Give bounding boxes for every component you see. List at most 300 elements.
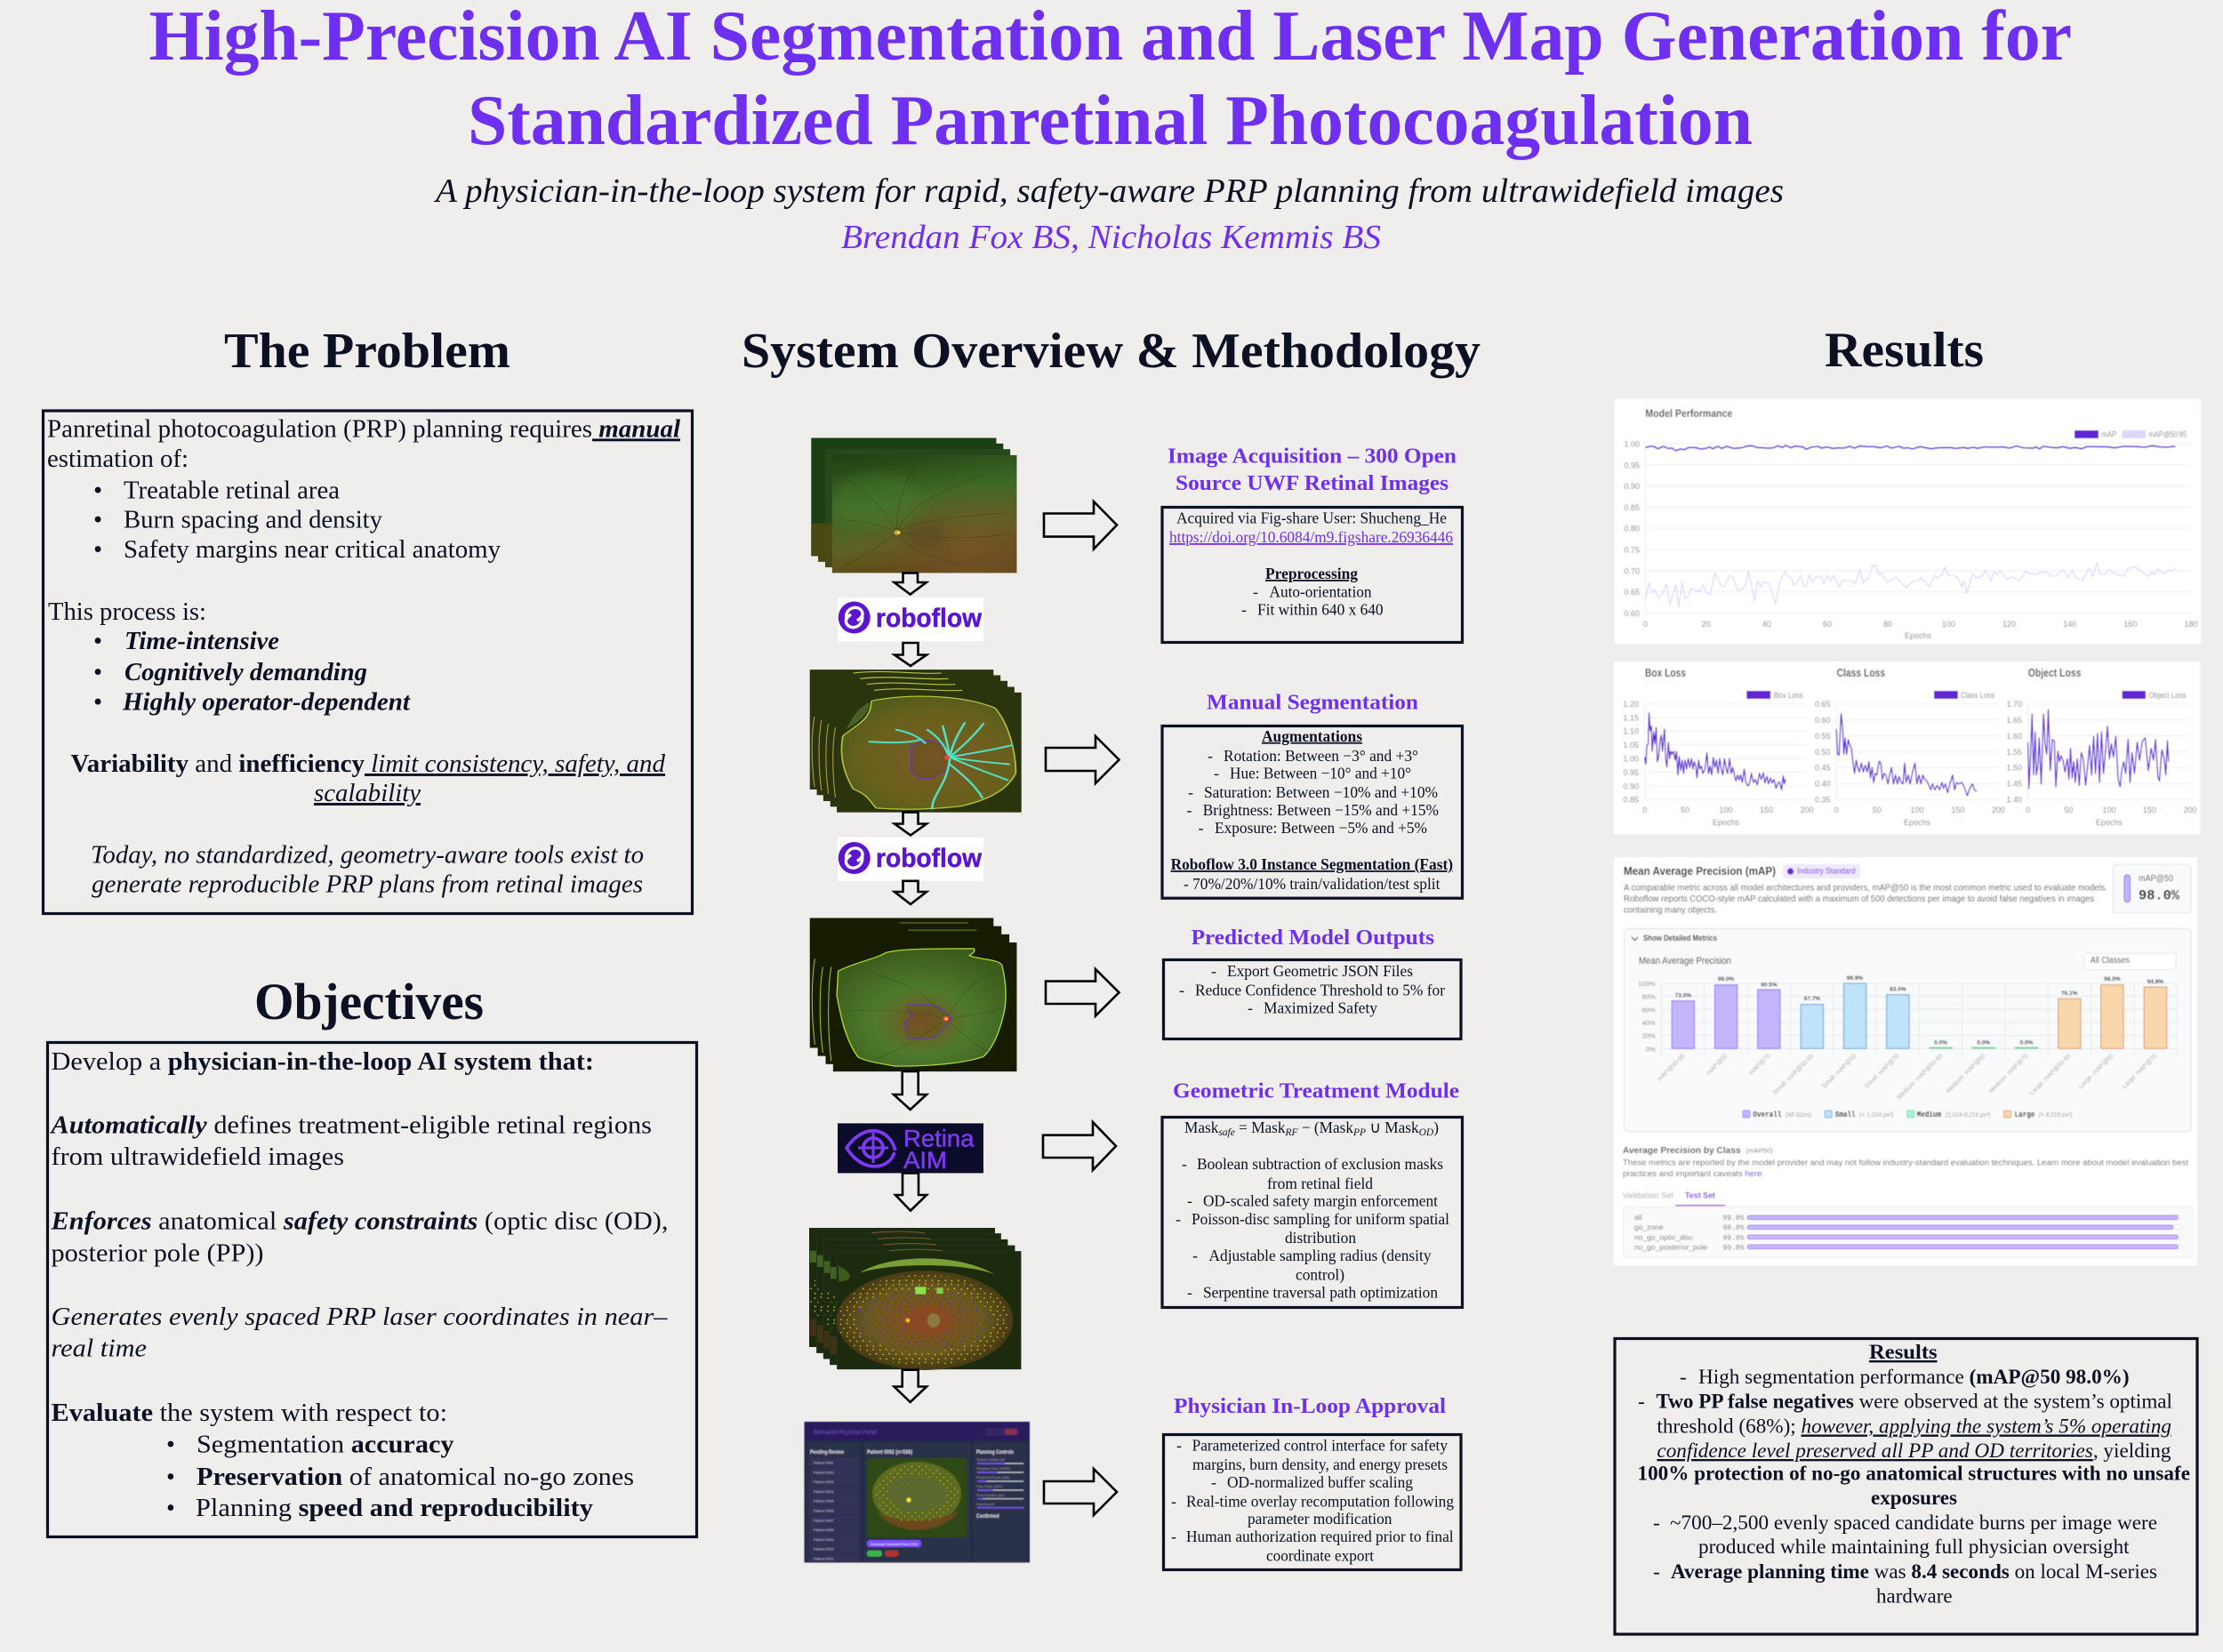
icon: target eye bbox=[847, 1131, 895, 1167]
portal planning controls: Peripheral Power (mW) bbox=[976, 1476, 1009, 1480]
portal sidebar: Patient 0010 bbox=[814, 1547, 834, 1551]
objective: automatically defines: from ultrawidefield images bbox=[52, 1143, 344, 1171]
class precision table bbox=[1624, 1207, 2193, 1257]
panel: physician approval details: OD-normalized buffer scaling bbox=[1227, 1473, 1413, 1491]
portal planning controls bbox=[973, 1442, 1026, 1562]
panel: image acquisition details: Acquired via Fig-share User: Shucheng_He bbox=[1176, 509, 1447, 527]
safe mask formula: RF bbox=[1285, 1126, 1298, 1138]
result: candidate burns: ~700–2,500 evenly spaced candidate burns per image were bbox=[1670, 1512, 2157, 1535]
chart: object loss: 100 bbox=[2102, 806, 2116, 814]
legend: mAP bbox=[2101, 430, 2116, 439]
heading: geometric treatment module: Geometric Treatment Module bbox=[1173, 1079, 1459, 1103]
chart panel: model performance: 0.65 bbox=[1624, 588, 1640, 597]
gap statement: Today, no standardized, geometry-aware tools exist to bbox=[91, 841, 644, 870]
portal planning controls: Planning Controls bbox=[976, 1450, 1015, 1456]
bar value labels bbox=[1675, 975, 2163, 1046]
title: Standardized Panretinal Photocoagulation bbox=[468, 82, 1753, 160]
panel: image acquisition details: - bbox=[1241, 600, 1247, 618]
result: segmentation performance: - bbox=[1680, 1366, 1687, 1389]
category labels bbox=[1657, 1053, 2158, 1101]
y axis labels: 20% bbox=[1642, 1032, 1656, 1040]
category labels: Medium: mAP@50-95 bbox=[1897, 1053, 1944, 1101]
chart: box loss: 1.20 bbox=[1623, 700, 1639, 709]
heading: Results: Results bbox=[1825, 323, 1984, 378]
bar value labels: 99.9% bbox=[1847, 975, 1863, 982]
panel: geometric module details: from retinal field bbox=[1267, 1175, 1373, 1192]
panel: results summary bbox=[1615, 1339, 2197, 1634]
panel: physician approval details: - bbox=[1176, 1437, 1182, 1455]
evaluation bullets bbox=[166, 1431, 634, 1522]
safe mask formula: Mask bbox=[1184, 1119, 1220, 1136]
chart: class loss: 0 bbox=[1834, 806, 1839, 814]
chart: box loss: 1.00 bbox=[1623, 754, 1639, 763]
panel: physician approval details: Human authorization required prior to final bbox=[1186, 1528, 1454, 1545]
panel: image acquisition details: Fit within 640 x 640 bbox=[1257, 600, 1384, 618]
stat card: mAP@50: 98.0% bbox=[2139, 888, 2179, 904]
bar chart legend: (All Sizes) bbox=[1786, 1112, 1812, 1119]
chart: box loss: 150 bbox=[1760, 806, 1773, 814]
result: planning time bbox=[1653, 1560, 2157, 1608]
chart panel: model performance: 0.80 bbox=[1624, 525, 1640, 533]
chart: class loss bbox=[1815, 667, 2005, 827]
portal header bbox=[804, 1422, 1030, 1440]
chart panel: model performance: 20 bbox=[1702, 620, 1711, 629]
category labels: Medium: mAP@75 bbox=[1988, 1053, 2029, 1095]
bar chart gridlines bbox=[1661, 983, 2177, 1055]
y axis labels: 100% bbox=[1638, 980, 1656, 988]
bar chart legend bbox=[1743, 1111, 2072, 1119]
chart: class loss: 100 bbox=[1910, 806, 1924, 814]
chart panel: model performance: 100 bbox=[1942, 620, 1955, 629]
chart: class loss: 0.50 bbox=[1815, 748, 1830, 757]
arrow: images to roboflow bbox=[895, 573, 927, 594]
process bullets: • bbox=[93, 627, 102, 655]
chart: class loss: 200 bbox=[1992, 806, 2005, 814]
chart: box loss: 50 bbox=[1681, 806, 1689, 814]
arrow: to manual segmentation bbox=[1046, 736, 1119, 783]
result: planning time: - bbox=[1653, 1560, 1660, 1584]
bar chart legend: Small bbox=[1835, 1111, 1856, 1119]
heading: predicted model outputs: Predicted Model Outputs bbox=[1192, 926, 1434, 950]
panel: mean average precision bbox=[1614, 857, 2197, 1266]
result: planning time: Average planning time was 8.4 seconds on local M-series bbox=[1671, 1560, 2157, 1584]
arrow: treatment map to portal bbox=[895, 1370, 927, 1402]
manual estimation bullets: Safety margins near critical anatomy bbox=[124, 535, 501, 564]
panel: geometric module details: - bbox=[1182, 1155, 1187, 1173]
y axis labels bbox=[1638, 980, 1656, 1053]
average precision by class: These metrics are reported by the model provider and may not follow industry-standard evaluation techniques. Learn more about model evaluation best bbox=[1623, 1159, 2189, 1167]
arrow: RetinaAIM to treatment map bbox=[895, 1173, 927, 1211]
panel: physician approval details bbox=[1163, 1435, 1461, 1570]
panel: geometric module details: Adjustable sampling radius (density bbox=[1209, 1247, 1432, 1265]
arrow: predictions to RetinaAIM bbox=[894, 1071, 927, 1110]
panel: predicted outputs details: - bbox=[1211, 962, 1216, 980]
objective: automatically defines bbox=[49, 1111, 652, 1171]
chart: class loss: 50 bbox=[1873, 806, 1882, 814]
objective: evaluate: Evaluate the system with respect to: bbox=[52, 1399, 447, 1427]
chart: box loss: 0.95 bbox=[1623, 768, 1639, 777]
category labels: Small: mAP@50 bbox=[1821, 1053, 1858, 1090]
portal planning controls: Pulse Duration (ms) bbox=[976, 1494, 1005, 1497]
average precision by class: 99.0% bbox=[1723, 1215, 1745, 1223]
posterior pole outline bbox=[911, 740, 950, 778]
result: false negatives: Two PP false negatives were observed at the system’s optimal bbox=[1656, 1391, 2172, 1414]
badge: industry standard bbox=[1783, 864, 1860, 878]
chart panel: model performance: Model Performance bbox=[1645, 409, 1732, 420]
evaluation bullets: Planning speed and reproducibility bbox=[196, 1495, 593, 1522]
panel: physician approval details: margins, burn density, and energy presets bbox=[1192, 1456, 1448, 1473]
legend bbox=[2075, 430, 2187, 439]
vessel annotations bbox=[870, 723, 1012, 809]
problem statement text bbox=[47, 414, 681, 473]
average precision by class: 98.0% bbox=[1723, 1224, 1745, 1232]
gap statement: generate reproducible PRP plans from retinal images bbox=[92, 870, 643, 898]
category labels: Medium: mAP@50 bbox=[1946, 1053, 1986, 1095]
average precision by class: all bbox=[1634, 1213, 1642, 1222]
manual estimation bullets: • bbox=[93, 535, 102, 564]
result: planning time: hardware bbox=[1876, 1585, 1953, 1608]
panel: geometric module details: - bbox=[1187, 1192, 1192, 1210]
bar chart legend: (> 8,216 px²) bbox=[2038, 1112, 2072, 1119]
result: candidate burns: - bbox=[1653, 1512, 1660, 1535]
panel: manual segmentation details: Roboflow 3.0 Instance Segmentation (Fast) bbox=[1171, 855, 1453, 874]
panel: geometric module details: - bbox=[1192, 1247, 1198, 1264]
chart: class loss: 0.45 bbox=[1815, 764, 1830, 773]
panel: image acquisition details: - bbox=[1253, 583, 1258, 601]
panel: predicted outputs details bbox=[1163, 960, 1461, 1039]
manual estimation bullets: Treatable retinal area bbox=[124, 477, 340, 505]
heading: Objectives: Objectives bbox=[254, 973, 484, 1030]
panel: manual segmentation details: Exposure: Between −5% and +5% bbox=[1215, 819, 1427, 837]
chart: object loss: 1.55 bbox=[2006, 748, 2022, 757]
logo: RetinaAIM: Retina bbox=[903, 1126, 975, 1152]
green treatment markers bbox=[915, 1287, 926, 1295]
chart panel: model performance: 0.60 bbox=[1624, 609, 1640, 618]
panel: predicted outputs details: - bbox=[1248, 998, 1253, 1016]
result: segmentation performance: High segmentation performance (mAP@50 98.0%) bbox=[1698, 1366, 2130, 1389]
objective: generates: Generates evenly spaced PRP laser coordinates in near– bbox=[52, 1303, 669, 1331]
line: mAP bbox=[1645, 445, 2175, 451]
physician portal screenshot bbox=[804, 1422, 1030, 1562]
image stack: predicted outputs bbox=[810, 918, 1016, 1071]
optic disc bbox=[944, 756, 950, 759]
chart: box loss: 200 bbox=[1801, 806, 1814, 814]
subtitle: A physician-in-the-loop system for rapid, safety-aware PRP planning from ultrawidefield images bbox=[433, 172, 1784, 210]
logo: roboflow training: roboflow bbox=[876, 844, 983, 873]
evaluation bullets: • bbox=[166, 1495, 175, 1522]
mAP description: containing many objects. bbox=[1624, 904, 1717, 915]
variability statement: Variability and inefficiency limit consistency, safety, and bbox=[71, 750, 665, 778]
panel: physician approval details: Parameterized control interface for safety bbox=[1192, 1437, 1448, 1455]
logo: RetinaAIM bbox=[838, 1123, 983, 1174]
panel: geometric module details: - bbox=[1187, 1283, 1192, 1301]
result: candidate burns: produced while maintaining full physician oversight bbox=[1698, 1536, 2130, 1559]
average precision by class: Average Precision by Class bbox=[1623, 1145, 1741, 1156]
chart: class loss: 0.60 bbox=[1815, 716, 1830, 725]
bar chart legend: Large bbox=[2015, 1111, 2034, 1119]
chart: class loss: Class Loss bbox=[1961, 691, 1994, 700]
category labels: mAP@75 bbox=[1748, 1053, 1771, 1077]
evaluation bullets: Preservation of anatomical no-go zones bbox=[197, 1464, 634, 1491]
detailed metrics panel: All Classes bbox=[2091, 956, 2130, 966]
result: candidate burns bbox=[1653, 1512, 2157, 1559]
portal sidebar: Patient 0005 bbox=[814, 1499, 834, 1503]
chart: object loss: 1.40 bbox=[2006, 796, 2022, 805]
average precision by class: Test Set bbox=[1685, 1191, 1715, 1200]
portal sidebar: Patient 0008 bbox=[814, 1528, 834, 1532]
category labels: mAP@50 bbox=[1705, 1053, 1729, 1077]
panel: manual segmentation details: - bbox=[1186, 801, 1192, 819]
small bars bbox=[1801, 983, 1909, 1048]
y axis labels: 40% bbox=[1642, 1019, 1656, 1027]
chart: box loss: 0 bbox=[1642, 806, 1647, 814]
variability statement: scalability bbox=[314, 779, 421, 807]
chart panel: model performance: 0.95 bbox=[1624, 461, 1640, 469]
manual estimation bullets bbox=[93, 477, 501, 564]
portal planning controls: Distance Buffer (dd) bbox=[976, 1458, 1005, 1462]
result: false negatives: threshold (68%); however, applying the system’s 5% operating bbox=[1657, 1415, 2171, 1439]
predicted posterior pole bbox=[905, 1005, 951, 1039]
process bullets bbox=[93, 627, 411, 717]
portal planning controls: Flow Power (GHF) bbox=[976, 1485, 1003, 1488]
panel: image acquisition details bbox=[1162, 507, 1462, 642]
chart: object loss: 1.60 bbox=[2006, 732, 2022, 741]
chart: box loss: 0.90 bbox=[1623, 782, 1639, 790]
y axis labels: 60% bbox=[1642, 1006, 1656, 1014]
chart: object loss: Epochs bbox=[2096, 818, 2123, 827]
result: false negatives: - bbox=[1638, 1391, 1645, 1414]
bar chart legend: (1,024-8,216 px²) bbox=[1946, 1112, 1990, 1119]
portal sidebar: Patient 0006 bbox=[814, 1508, 834, 1513]
category labels: Large: mAP@50-95 bbox=[2029, 1053, 2072, 1096]
panel: geometric module details: - bbox=[1176, 1210, 1181, 1228]
arrow: segmentation to roboflow bbox=[895, 813, 927, 835]
heading: image acquisition bbox=[1168, 445, 1457, 495]
portal center panel: Patient 0082 (n=588) bbox=[867, 1450, 912, 1456]
manual estimation bullets: Burn spacing and density bbox=[124, 505, 382, 533]
logo: roboflow training bbox=[838, 838, 983, 881]
chart: object loss: 1.50 bbox=[2006, 764, 2022, 773]
evaluation bullets: • bbox=[166, 1464, 175, 1491]
objective: generates bbox=[52, 1303, 669, 1363]
objective: generates: real time bbox=[52, 1335, 147, 1363]
panel: manual segmentation details: Rotation: Between −3° and +3° bbox=[1224, 747, 1418, 765]
process bullets: • bbox=[93, 688, 102, 717]
bar value labels: 94.8% bbox=[2147, 979, 2163, 985]
panel: geometric module details: distribution bbox=[1285, 1229, 1356, 1247]
chart: box loss: Box Loss bbox=[1645, 667, 1686, 679]
logo: roboflow bbox=[838, 597, 983, 642]
heading: manual segmentation: Manual Segmentation bbox=[1207, 691, 1418, 714]
chart: box loss: 100 bbox=[1719, 806, 1733, 814]
logo: roboflow: roboflow bbox=[876, 604, 983, 633]
panel: predicted outputs details: Export Geometric JSON Files bbox=[1227, 962, 1413, 980]
problem statement text: estimation of: bbox=[47, 445, 189, 473]
bar value labels: 0.0% bbox=[1977, 1040, 1990, 1046]
chart: box loss: 1.05 bbox=[1623, 741, 1639, 750]
panel: geometric module details: Serpentine traversal path optimization bbox=[1203, 1283, 1438, 1301]
chart panel: model performance: 0.75 bbox=[1624, 546, 1640, 555]
chart: class loss: Epochs bbox=[1904, 818, 1931, 827]
chart: object loss: Object Loss bbox=[2028, 667, 2081, 679]
tabs: Validation Set bbox=[1623, 1191, 1674, 1200]
average precision by class: 99.0% bbox=[1723, 1234, 1745, 1242]
panel: physician approval details: - bbox=[1211, 1473, 1216, 1491]
safe mask formula: OD bbox=[1419, 1126, 1434, 1138]
stat card: mAP@50: mAP@50 bbox=[2139, 874, 2173, 884]
portal sidebar bbox=[807, 1442, 861, 1562]
heading: image acquisition: Source UWF Retinal Images bbox=[1176, 472, 1449, 495]
objective: enforces: Enforces anatomical safety constraints (optic disc (OD), bbox=[50, 1208, 669, 1236]
detailed metrics panel: Mean Average Precision bbox=[1639, 956, 1731, 966]
result: false negatives bbox=[1638, 1391, 2190, 1510]
objective: develop: Develop a physician-in-the-loop AI system that: bbox=[52, 1048, 594, 1076]
large bars bbox=[2058, 985, 2167, 1048]
chart panel: model performance: 0 bbox=[1643, 620, 1648, 629]
chart panel: model performance: 80 bbox=[1883, 620, 1892, 629]
chart: box loss: 1.15 bbox=[1623, 713, 1639, 722]
average precision by class: practices and important caveats here. bbox=[1623, 1169, 1764, 1178]
mAP description: A comparable metric across all model architectures and providers, mAP@50 is the most common metric used to evaluate models. bbox=[1624, 883, 2107, 894]
chart: box loss: 1.10 bbox=[1623, 727, 1639, 736]
panel: manual segmentation details: - 70%/20%/10% train/validation/test split bbox=[1184, 875, 1440, 893]
chart: object loss: 0 bbox=[2026, 806, 2030, 814]
portal sidebar: Patient 0002 bbox=[814, 1471, 834, 1474]
bar value labels: 0.0% bbox=[1934, 1040, 1947, 1046]
gap statement bbox=[91, 841, 644, 898]
safe mask formula: safe bbox=[1218, 1126, 1235, 1138]
chart: class loss: 0.35 bbox=[1815, 796, 1830, 805]
portal sidebar: Patient 0009 bbox=[814, 1537, 834, 1542]
portal center panel bbox=[863, 1442, 970, 1562]
result: false negatives: confidence level preserved all PP and OD territories, yielding bbox=[1657, 1439, 2171, 1463]
manual estimation bullets: • bbox=[93, 505, 102, 533]
panel: the problem bbox=[43, 411, 692, 914]
safe mask formula: = Mask bbox=[1235, 1119, 1286, 1136]
chart: class loss: 150 bbox=[1951, 806, 1965, 814]
portal sidebar: Patient 0004 bbox=[814, 1489, 834, 1494]
chart panel: model performance: 120 bbox=[2002, 620, 2016, 629]
average precision by class bbox=[1623, 1145, 2193, 1257]
panel: geometric module details: Poisson-disc sampling for uniform spatial bbox=[1192, 1210, 1449, 1228]
problem statement text: Panretinal photocoagulation (PRP) planning requires manual bbox=[47, 414, 681, 443]
heading: The Problem: The Problem bbox=[224, 324, 510, 379]
chart: box loss bbox=[1623, 667, 1814, 827]
bar value labels: 67.7% bbox=[1804, 996, 1820, 1002]
average precision by class: (mAP50) bbox=[1745, 1147, 1774, 1154]
chart panel: model performance: 140 bbox=[2063, 620, 2076, 629]
category labels: Large: mAP@75 bbox=[2122, 1053, 2158, 1090]
bar value labels: 76.1% bbox=[2061, 990, 2078, 997]
panel: manual segmentation details: Saturation: Between −10% and +10% bbox=[1204, 783, 1438, 801]
authors: Brendan Fox BS, Nicholas Kemmis BS bbox=[841, 219, 1381, 256]
arrow: roboflow to predictions bbox=[895, 881, 927, 904]
chart: object loss: 1.70 bbox=[2006, 700, 2022, 709]
process bullets: Highly operator-dependent bbox=[122, 688, 411, 717]
variability statement bbox=[71, 750, 665, 807]
medium bars bbox=[1930, 1047, 2038, 1048]
panel: manual segmentation details bbox=[1162, 726, 1462, 898]
result: false negatives: 100% protection of no-go anatomical structures with no unsafe bbox=[1638, 1462, 2190, 1485]
bar chart legend: Medium bbox=[1917, 1111, 1942, 1119]
panel: physician approval details: - bbox=[1171, 1492, 1176, 1510]
panel: physician approval details: Real-time overlay recomputation following bbox=[1186, 1492, 1454, 1510]
bar value labels: 83.0% bbox=[1890, 987, 1906, 992]
panel: image acquisition details: Auto-orientation bbox=[1270, 583, 1371, 601]
panel: physician approval details: coordinate export bbox=[1266, 1547, 1374, 1565]
chart: object loss: 200 bbox=[2183, 806, 2197, 814]
portal planning controls: Spacing (un) bbox=[976, 1503, 994, 1506]
panel: manual segmentation details: Brightness: Between −15% and +15% bbox=[1203, 801, 1439, 819]
average precision by class: no_go_posterior_pole bbox=[1634, 1243, 1708, 1252]
panel: manual segmentation details: Augmentations bbox=[1262, 727, 1362, 745]
image stack: raw retinal images bbox=[811, 438, 1016, 573]
panel: manual segmentation details: Hue: Between −10° and +10° bbox=[1230, 765, 1411, 782]
portal sidebar: Patient 0007 bbox=[814, 1519, 834, 1522]
legend: mAP@50:95 bbox=[2148, 430, 2187, 439]
detailed metrics panel bbox=[1624, 928, 2191, 1132]
chart panel: model performance: Epochs bbox=[1905, 631, 1932, 640]
chart: object loss: 1.45 bbox=[2006, 780, 2022, 789]
title bbox=[149, 0, 2072, 160]
portal header: RetinaAIM Physician Portal bbox=[814, 1430, 877, 1436]
panel: manual segmentation details: - bbox=[1208, 747, 1213, 765]
chart panel: losses bbox=[1614, 662, 2200, 835]
panel: physician approval details: parameter modification bbox=[1248, 1510, 1392, 1528]
category labels: Large: mAP@50 bbox=[2078, 1053, 2115, 1090]
chart panel: model performance: 0.90 bbox=[1624, 482, 1640, 491]
manual estimation bullets: • bbox=[93, 477, 102, 505]
category labels: Small: mAP@50-95 bbox=[1772, 1053, 1815, 1096]
panel: manual segmentation details: - bbox=[1188, 783, 1193, 801]
panel: geometric module details bbox=[1162, 1117, 1462, 1307]
arrow: to physician approval bbox=[1044, 1469, 1117, 1515]
detailed metrics panel: Show Detailed Metrics bbox=[1643, 934, 1717, 943]
chart panel: model performance: 1.00 bbox=[1624, 439, 1640, 448]
category labels: Small: mAP@75 bbox=[1864, 1053, 1900, 1090]
evaluation bullets: Segmentation accuracy bbox=[197, 1431, 453, 1458]
process bullets: • bbox=[93, 658, 102, 686]
heading: System Overview & Methodology: System Overview & Methodology bbox=[742, 324, 1481, 379]
chart: class loss: 0.40 bbox=[1815, 780, 1830, 789]
chart panel: model performance: 60 bbox=[1823, 620, 1832, 629]
safe mask formula: PP bbox=[1352, 1126, 1367, 1138]
panel: predicted outputs details: Reduce Confidence Threshold to 5% for bbox=[1195, 982, 1445, 999]
bar value labels: 73.0% bbox=[1675, 993, 1691, 999]
retinal field outline bbox=[841, 696, 1015, 809]
y axis labels: 0% bbox=[1646, 1045, 1656, 1053]
chart: object loss: 1.65 bbox=[2006, 716, 2022, 725]
panel: manual segmentation details: - bbox=[1214, 765, 1219, 782]
panel: geometric module details: Boolean subtraction of exclusion masks bbox=[1197, 1155, 1443, 1173]
mAP heading: Mean Average Precision (mAP) bbox=[1624, 864, 1776, 878]
mAP description: Roboflow reports COCO-style mAP calculated with a maximum of 500 detections per image to avoid false negatives in images bbox=[1624, 894, 2094, 904]
chart: box loss: Epochs bbox=[1713, 818, 1740, 827]
average precision by class: 99.0% bbox=[1723, 1245, 1745, 1252]
category labels: mAP@50-95 bbox=[1657, 1053, 1686, 1083]
panel: image acquisition details: Preprocessing bbox=[1265, 565, 1358, 582]
chart: box loss: Box Loss bbox=[1774, 691, 1803, 700]
bar value labels: 98.0% bbox=[1718, 976, 1734, 982]
overall bars bbox=[1672, 985, 1780, 1048]
chart panel: model performance: 180 bbox=[2184, 620, 2198, 629]
safe mask formula: − (Mask bbox=[1298, 1119, 1353, 1137]
panel: physician approval details: - bbox=[1171, 1528, 1176, 1545]
average precision by class: no_go_optic_disc bbox=[1634, 1232, 1694, 1241]
process description: This process is: bbox=[48, 597, 206, 626]
line: mAP@50:95 bbox=[1645, 563, 2175, 607]
chart panel: model performance: 160 bbox=[2123, 620, 2137, 629]
